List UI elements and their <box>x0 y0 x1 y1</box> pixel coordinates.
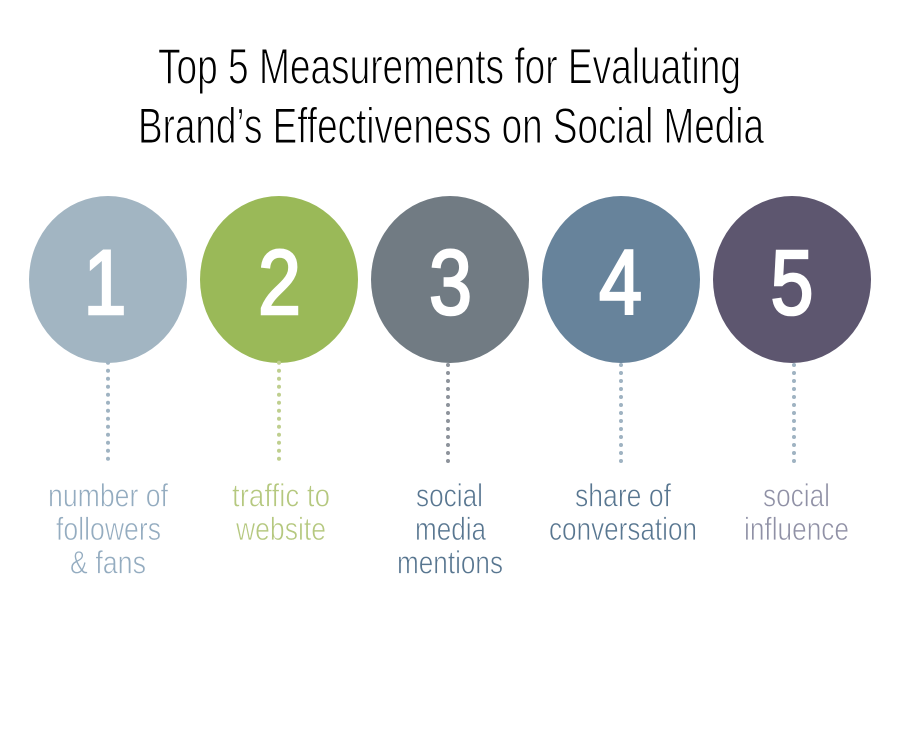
dotted connector 4 <box>619 365 623 462</box>
label 3: media <box>415 511 486 547</box>
circle 4 <box>542 196 700 363</box>
label 1: number of <box>48 478 168 514</box>
label 4: conversation <box>549 511 697 547</box>
label 5: influence <box>744 511 849 547</box>
item 1: number of followers and fans <box>29 196 187 580</box>
title <box>138 38 764 154</box>
label 3 <box>397 478 503 580</box>
item 3: social media mentions <box>371 196 529 580</box>
label 4: share of <box>575 478 671 514</box>
label 2: website <box>235 511 326 547</box>
label 1: & fans <box>70 544 146 580</box>
label 1: followers <box>56 511 161 547</box>
item 2: traffic to website <box>200 196 358 547</box>
number 2: 2 <box>258 232 301 334</box>
circle 1 <box>29 196 187 363</box>
item 5: social influence <box>713 196 871 547</box>
dotted connector 1 <box>106 363 110 459</box>
number 5: 5 <box>770 232 814 334</box>
label 5: social <box>763 478 830 514</box>
item 4: share of conversation <box>542 196 700 547</box>
label 3: social <box>416 478 483 514</box>
circle 2 <box>200 196 358 363</box>
circle 5 <box>713 196 871 363</box>
number 1: 1 <box>84 232 126 334</box>
label 2 <box>232 478 330 547</box>
number 4: 4 <box>599 232 642 334</box>
label 1 <box>48 478 168 580</box>
dotted connector 2 <box>277 363 281 459</box>
label 3: mentions <box>397 544 503 580</box>
circle 3 <box>371 196 529 363</box>
dotted connector 3 <box>446 365 450 462</box>
dotted connector 5 <box>792 365 796 462</box>
number 3: 3 <box>429 232 472 334</box>
label 5 <box>744 478 849 547</box>
label 2: traffic to <box>232 478 330 514</box>
label 4 <box>549 478 697 547</box>
